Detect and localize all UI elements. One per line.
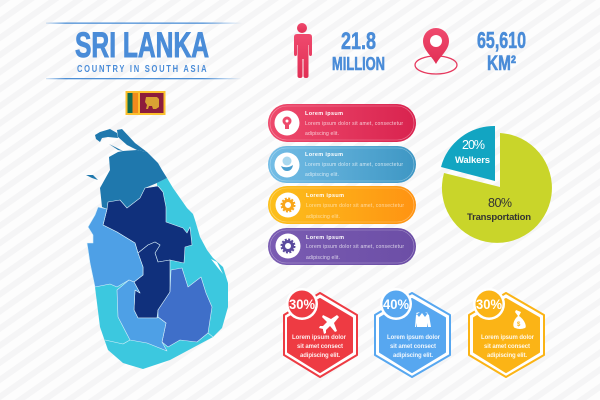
panel: 40% shirt card: adipiscing elit. — [393, 353, 433, 359]
icon: gear — [282, 198, 294, 212]
panel: 30% plane card — [284, 288, 357, 377]
population figure: 21.8 — [341, 28, 376, 55]
panel: lorem item 2 — [268, 146, 416, 183]
panel: lorem item 4 — [268, 228, 416, 265]
title block — [46, 22, 242, 79]
panel: 30% plane card: Lorem ipsum dolor — [292, 335, 347, 341]
panel: lorem item 3: Lorem ipsum — [306, 193, 344, 199]
panel: lorem item 1: adipiscing elit. — [305, 131, 339, 137]
region: Mannar spit — [86, 175, 98, 180]
icon: shirt — [415, 312, 431, 327]
panel: lorem item 1: Lorem ipsum — [305, 111, 343, 117]
pie chart: 80% — [488, 196, 512, 210]
panel: 30% money card: adipiscing elit. — [487, 353, 527, 359]
panel: lorem item 1 — [268, 104, 416, 142]
region: east coast lagoon — [211, 259, 223, 274]
region: south coast lines — [105, 333, 213, 344]
panel: lorem item 2: Lorem ipsum — [305, 152, 343, 158]
panel: lorem item 4: adipiscing elit. — [306, 255, 340, 261]
icon: light bulb — [282, 116, 292, 129]
region: inner sliver — [109, 144, 123, 151]
subtitle: COUNTRY IN SOUTH ASIA — [77, 63, 207, 74]
region: Jaffna peninsula — [95, 129, 118, 142]
icon: hand with water — [281, 156, 293, 171]
panel: 40% shirt card: sit amet consect — [390, 344, 436, 350]
panel: lorem item 4: Lorem ipsum dolor sit amet, consectetur — [306, 244, 404, 250]
panel: 40% shirt card: Lorem ipsum dolor — [387, 335, 441, 341]
panel: 30% plane card: adipiscing elit. — [300, 353, 340, 359]
panel: 40% shirt card — [375, 288, 450, 377]
panel: lorem item 3 — [268, 186, 416, 224]
area figure: KM² — [487, 52, 516, 75]
region: northern spit — [117, 129, 147, 152]
region: central navy — [134, 242, 170, 318]
pie chart: 20% — [462, 138, 485, 152]
panel: 40% shirt card: 40% — [383, 296, 410, 312]
panel: 30% plane card: sit amet consect — [297, 344, 343, 350]
icon: person — [294, 23, 312, 78]
panel: 30% plane card: 30% — [289, 296, 316, 312]
icon: Sri Lanka flag — [126, 91, 166, 115]
population figure — [332, 28, 385, 74]
icon: map pin — [415, 28, 457, 74]
pie slice: walkers — [441, 126, 495, 181]
panel: 30% money card: sit amet consect — [484, 344, 530, 350]
icon: plane — [319, 315, 339, 334]
pie chart: Walkers — [455, 155, 490, 166]
panel: lorem item 2: adipiscing elit. — [305, 172, 339, 178]
title: Sri Lanka: SRI LANKA — [75, 26, 209, 65]
region: sabaragamuwa light blue — [117, 280, 167, 351]
population figure: MILLION — [332, 54, 385, 74]
region: north western light blue — [87, 207, 143, 287]
area figure: 65,610 — [477, 27, 526, 53]
area figure — [477, 27, 526, 75]
pie slice: transportation — [442, 133, 552, 243]
icon: money bag: $ — [517, 322, 521, 328]
panel: lorem item 4: Lorem ipsum — [306, 235, 344, 241]
region: Uva blue — [158, 268, 212, 347]
panel: lorem item 3: Lorem ipsum dolor sit amet, consectetur — [306, 203, 404, 209]
panel: lorem item 3: adipiscing elit. — [306, 214, 340, 220]
panel: 30% money card: 30% — [476, 296, 503, 312]
panel: lorem item 2: Lorem ipsum dolor sit amet, consectetur — [305, 162, 403, 168]
region: northern province — [100, 150, 167, 209]
panel: 30% money card — [469, 288, 544, 377]
panel: 30% money card: Lorem ipsum dolor — [481, 335, 535, 341]
region: north central navy — [103, 186, 192, 263]
map of Sri Lanka — [86, 129, 228, 369]
region: island base, east and south coast — [95, 178, 228, 369]
panel: lorem item 1: Lorem ipsum dolor sit amet, consectetur — [305, 121, 403, 127]
pie chart — [441, 126, 552, 243]
pie chart: Transportation — [467, 212, 531, 223]
icon: gear — [282, 240, 294, 252]
